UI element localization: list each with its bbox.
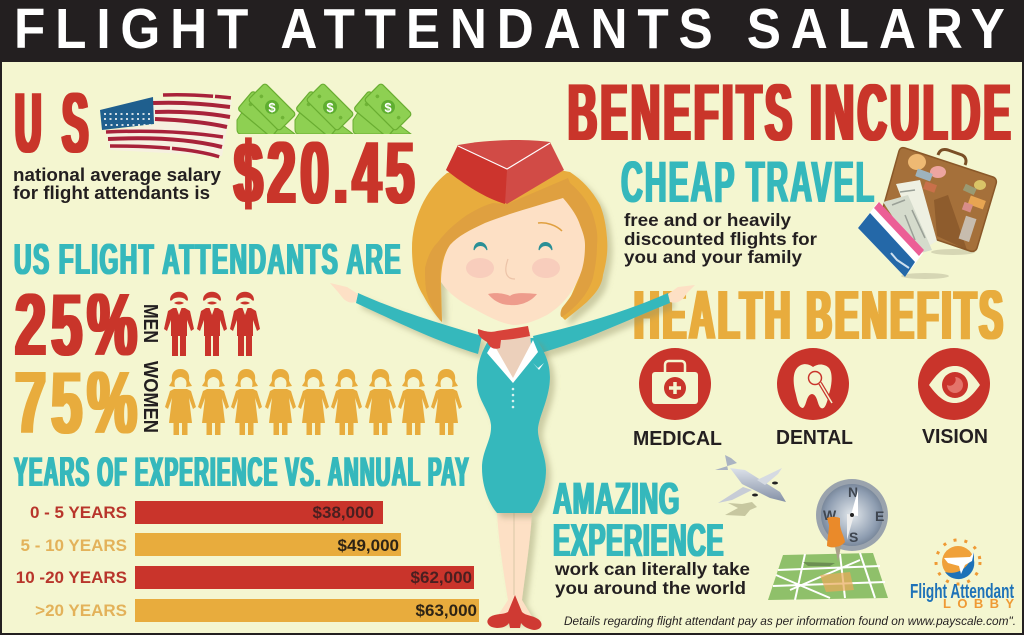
neck [492,332,531,383]
icon: compass: E [875,508,884,524]
mouth [488,293,537,305]
logo: flight attendant lobby [910,540,1014,611]
icon: vision [918,348,990,420]
stat: 75% women: WOMEN [139,361,161,433]
hand left [330,283,358,303]
icon: airplane [715,455,786,516]
right cheek [532,258,560,278]
text: amazing experience description [554,559,750,598]
leg split [513,513,515,595]
bar chart: experience vs pay: $38,000 [313,503,374,522]
bar chart: experience vs pay: 0 - 5 YEARS [30,503,127,522]
bar chart: experience vs pay: >20 YEARS [35,601,127,620]
collar [487,340,538,383]
icon: suitcase and tickets [858,148,996,279]
wing badge [533,363,544,370]
bar chart: experience vs pay: 10 -20 YEARS [16,568,127,587]
left eye [474,242,487,250]
bar chart: experience vs pay [16,501,479,622]
bar chart: experience vs pay: $49,000 [338,536,399,555]
text: S [62,76,89,171]
label: vision: VISION [922,425,988,448]
text: national average salary [13,165,221,203]
icon: three stacks of green money: $ [268,100,276,115]
bar chart: experience vs pay: $62,000 [411,568,472,587]
left cheek [466,258,494,278]
label: medical: MEDICAL [633,427,722,450]
bar chart: experience vs pay: $63,000 [416,601,477,620]
heading: amazing experience: AMAZING [553,473,680,524]
label: dental: DENTAL [776,426,853,449]
heading: US: U [15,76,42,171]
legs [495,513,534,620]
text: YEARS OF EXPERIENCE VS. ANNUAL PAY [14,448,470,495]
flight attendant character [330,140,695,630]
text: cheap travel description: you and your family [624,247,802,267]
icon: dental [777,348,849,420]
text: cheap travel description: discounted flights for [624,229,817,249]
icon: orange map pin [827,517,845,562]
face [441,198,585,325]
scarf [478,326,530,349]
text: amazing experience description: work can literally take [554,559,750,579]
buttons [512,388,514,408]
icon: three stacks of green money: $ [384,100,392,115]
icon: medical [639,348,711,420]
dress [477,338,550,513]
nose [506,259,515,279]
hair [412,160,607,322]
footer source note: Details regarding flight attendant pay as per information found on www.payscale.com". [564,616,1016,628]
stat: 25% men: 25% [15,275,142,374]
icon: three stacks of green money: $ [326,100,334,115]
shoes [487,595,541,630]
hat [446,140,564,204]
icon: distressed US flag [100,95,232,157]
text: cheap travel description: free and or heavily [624,210,791,230]
eyebrow [538,223,562,231]
right eye [539,242,552,250]
heading: US flight attendants are: US FLIGHT ATTENDANTS ARE [14,235,402,284]
text: amazing experience description: you around the world [555,578,746,598]
salary figure: $20.45 [234,123,419,222]
hand right [668,285,695,303]
icon: compass: W [823,507,837,523]
icon: compass [816,479,888,551]
icon: compass: N [848,484,858,500]
icon: three stacks of green money [237,83,412,137]
text: national average salary: national average salary [13,165,221,185]
arm right [533,293,670,354]
text: cheap travel description [624,210,817,267]
bar chart: experience vs pay: 5 - 10 YEARS [21,536,127,555]
stat: 75% women [15,353,462,452]
heading: amazing experience: EXPERIENCE [553,514,724,566]
stat: 75% women: 75% [15,353,142,452]
icon: compass: S [849,529,858,545]
hair fringe [425,178,597,322]
text: national average salary: for flight attendants is [13,183,210,203]
arm left [356,293,482,354]
stat: 25% men: MEN [139,304,161,343]
logo: flight attendant lobby: LOBBY [943,596,1014,611]
icon: folded map [768,553,888,600]
heading: amazing experience [553,473,724,566]
